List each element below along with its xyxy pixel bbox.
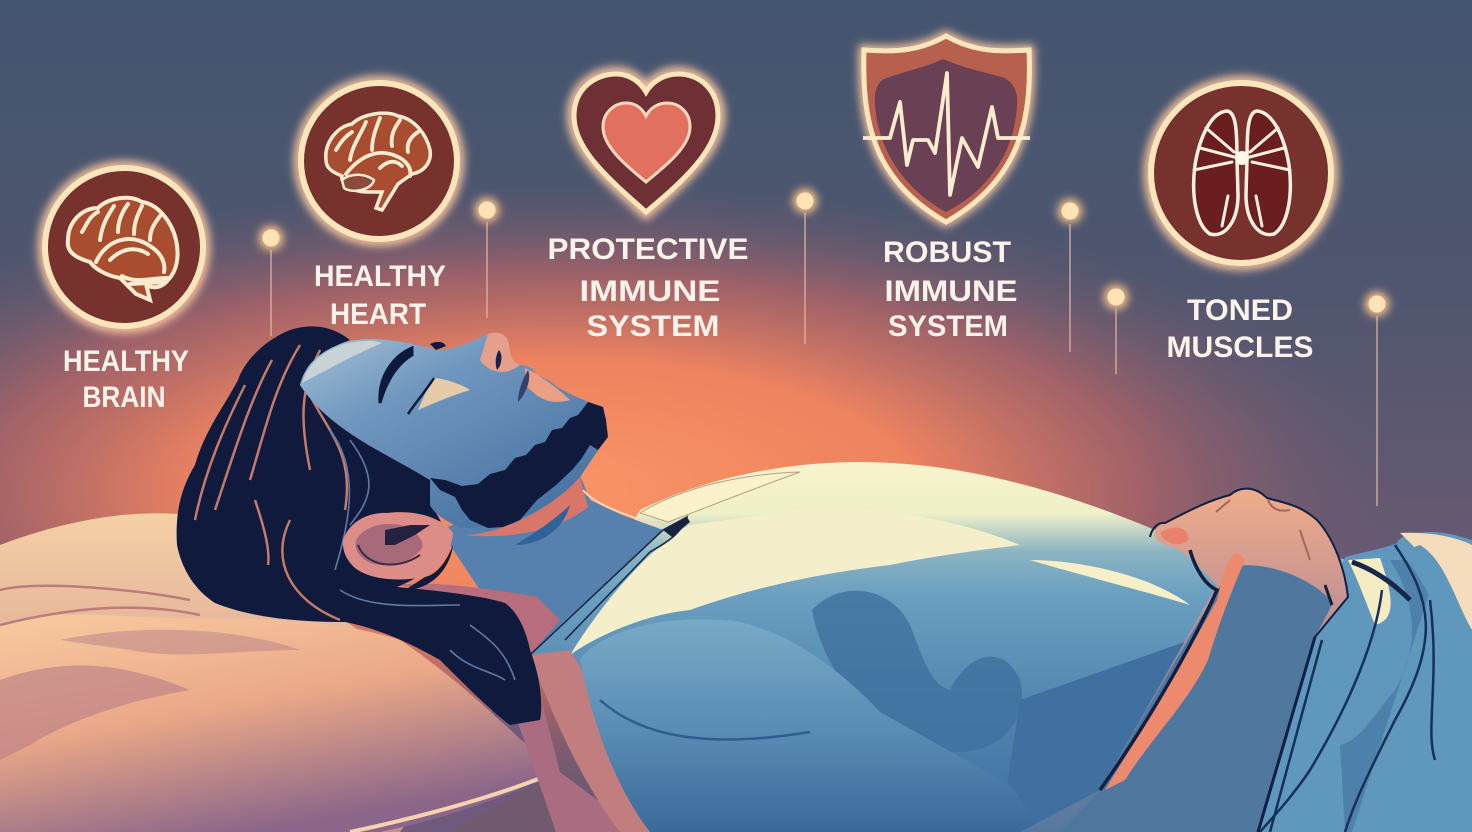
beard (430, 402, 608, 528)
label: healthy brain (63, 345, 189, 414)
label: healthy brain: HEALTHY (63, 345, 189, 378)
shirt chest and sleeve (510, 619, 1045, 832)
blanket (1250, 532, 1472, 832)
shirt body (530, 462, 1472, 832)
forearm and hand (1020, 489, 1348, 832)
ear (343, 512, 453, 590)
glowing lights (259, 189, 1389, 506)
hair (177, 326, 541, 725)
label: healthy heart (314, 260, 446, 331)
label: robust immune system: SYSTEM (888, 310, 1008, 343)
label: robust immune system: ROBUST (883, 236, 1011, 269)
icon: healthy heart (brain medallion) (299, 81, 459, 241)
face (300, 333, 607, 528)
label: healthy brain: BRAIN (82, 381, 166, 414)
label: toned muscles: MUSCLES (1166, 331, 1314, 364)
neck (400, 475, 690, 655)
label: robust immune system: IMMUNE (884, 275, 1018, 308)
icon: toned muscles (lungs medallion) (1149, 81, 1333, 265)
label: protective immune system: IMMUNE (580, 275, 720, 308)
label: robust immune system (883, 236, 1018, 343)
label: healthy heart: HEALTHY (314, 260, 446, 293)
label: protective immune system: SYSTEM (586, 310, 720, 343)
label: protective immune system: PROTECTIVE (548, 233, 748, 266)
icon: heart (572, 72, 720, 214)
icon: shield with heartbeat (863, 36, 1030, 222)
label: healthy heart: HEART (330, 298, 426, 331)
pillow (0, 513, 556, 832)
label: protective immune system (548, 233, 748, 343)
label: toned muscles (1166, 294, 1314, 364)
label: toned muscles: TONED (1187, 294, 1293, 327)
icon: healthy brain (43, 166, 205, 328)
